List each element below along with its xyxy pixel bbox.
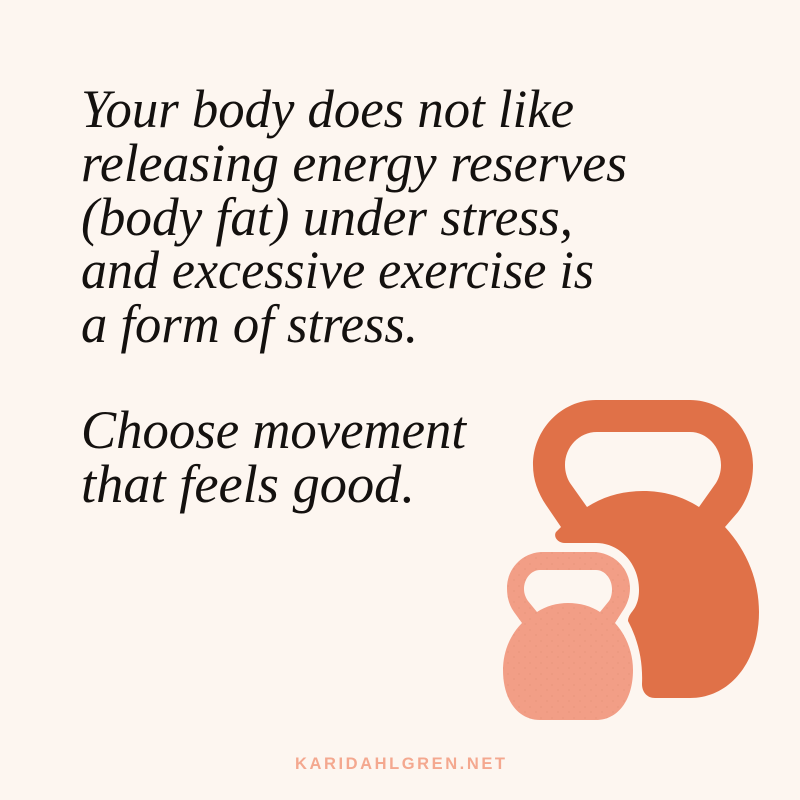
main statement text: (body fat) under stress, xyxy=(81,187,573,247)
main statement text: and excessive exercise is xyxy=(81,240,594,300)
call to action text: that feels good. xyxy=(81,454,415,514)
icon: large kettlebell xyxy=(533,400,759,698)
main statement text xyxy=(81,79,627,354)
footer website: KARIDAHLGREN.NET xyxy=(295,755,505,773)
call to action text: Choose movement xyxy=(81,400,468,460)
main statement text: releasing energy reserves xyxy=(81,133,627,193)
main statement text: a form of stress. xyxy=(81,294,418,354)
main statement text: Your body does not like xyxy=(81,79,574,139)
call to action text xyxy=(81,400,468,514)
icon: small kettlebell xyxy=(503,552,633,720)
